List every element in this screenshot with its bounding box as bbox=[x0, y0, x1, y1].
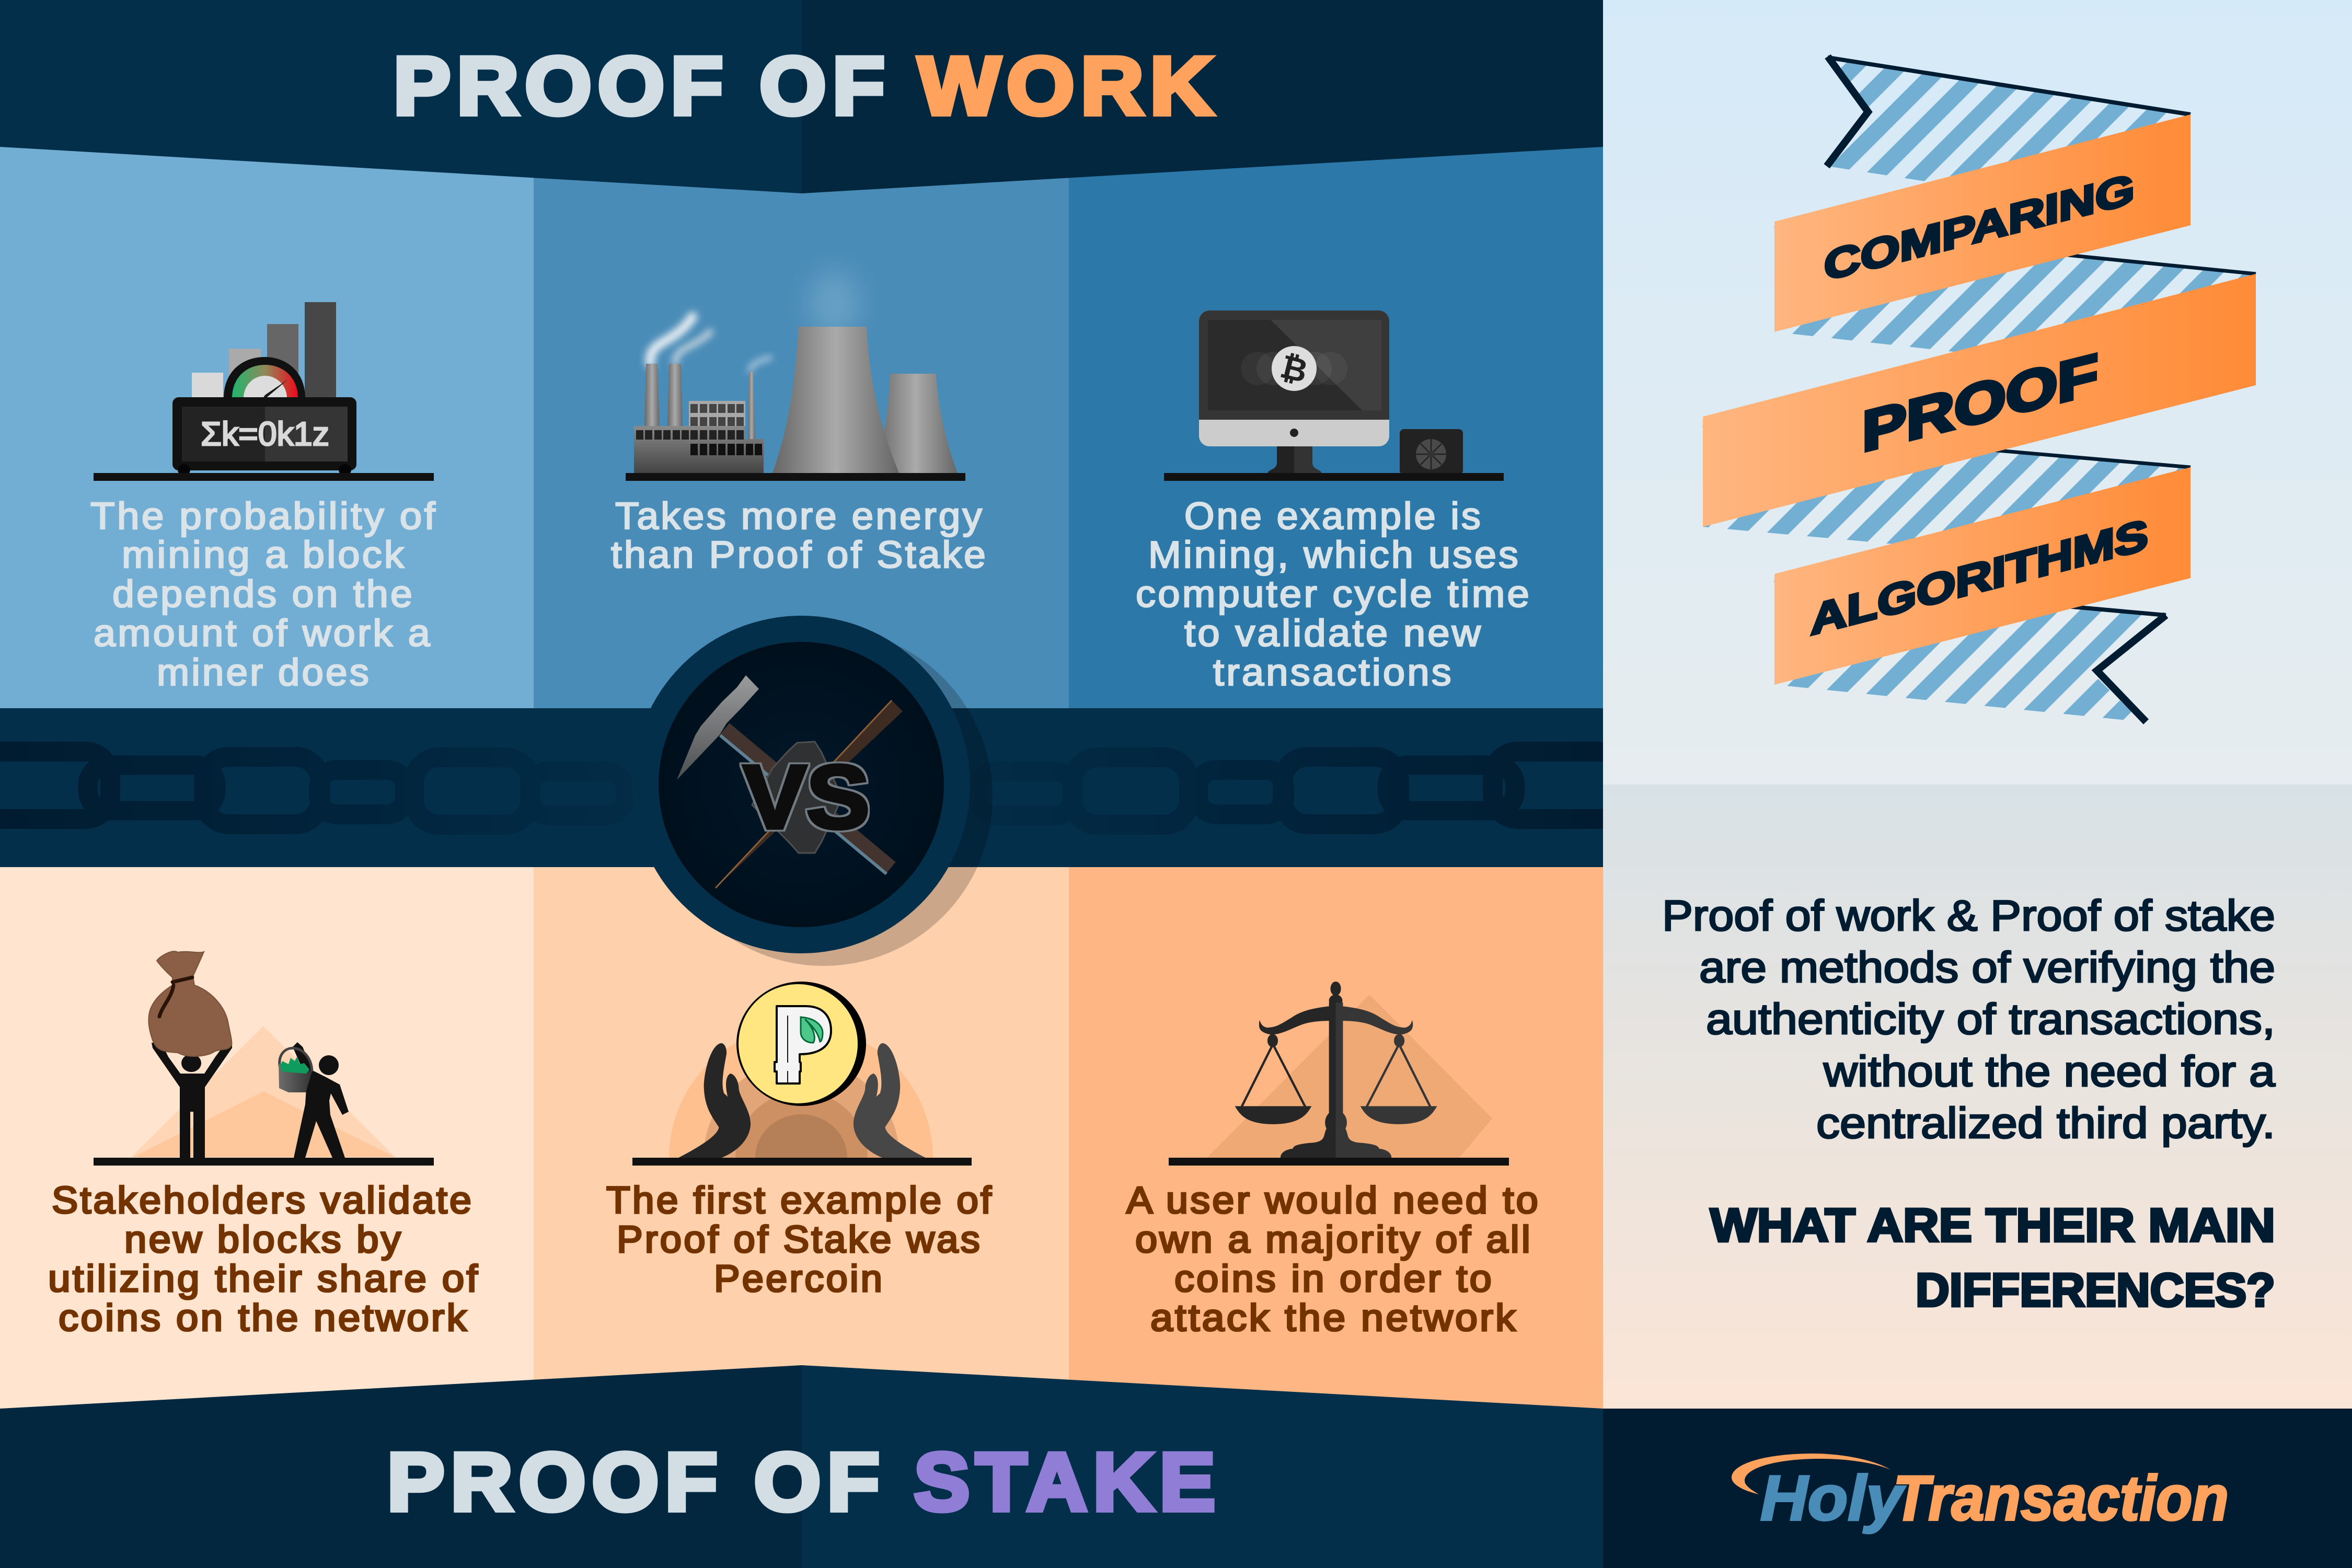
ribbon band: comparing bbox=[1774, 114, 2190, 332]
bitcoin symbol: ₿ bbox=[1277, 349, 1311, 390]
ribbon back stripes 4 bbox=[1774, 580, 2166, 722]
pick handle bbox=[720, 729, 891, 874]
vs text: VS bbox=[743, 747, 870, 847]
text: attack the network: own a majority of all bbox=[1135, 1219, 1532, 1261]
panel: proof of stake column 2 bbox=[534, 862, 1069, 1437]
header band bbox=[0, 0, 1603, 193]
footer band bbox=[0, 1365, 1603, 1568]
left hand bbox=[678, 1043, 751, 1158]
vs badge shadow bbox=[655, 628, 993, 966]
icon: computer with bitcoin and fan bbox=[1199, 310, 1463, 475]
shelf 6 bbox=[1169, 1158, 1509, 1166]
ribbon text: algorithms: ALGORITHMS bbox=[1811, 510, 2148, 644]
gauge readout: Σk=0k1z bbox=[201, 415, 329, 453]
title: proof of stake: PROOF OF bbox=[387, 1437, 886, 1528]
panel: proof of stake column 3 bbox=[1069, 862, 1603, 1437]
shelf 2 bbox=[626, 473, 965, 481]
text: mining example bbox=[1136, 495, 1531, 694]
chain band bbox=[0, 708, 1603, 867]
icon: peercoin held by hands bbox=[669, 982, 933, 1158]
ribbon band: algorithms bbox=[1774, 467, 2190, 685]
icon: balance scales bbox=[1207, 982, 1492, 1159]
logo: holytransaction: Transaction bbox=[1893, 1462, 2229, 1534]
panel: proof of work column 2 bbox=[534, 131, 1069, 716]
ribbon back stripes 2 bbox=[1774, 226, 2256, 385]
text: mining example: transactions bbox=[1213, 652, 1454, 694]
title: proof of work: WORK bbox=[918, 41, 1219, 132]
money bag bbox=[148, 951, 232, 1056]
panel: proof of work column 1 bbox=[0, 131, 534, 716]
panel: proof of work column 3 bbox=[1069, 131, 1603, 716]
chain: right bbox=[978, 752, 1624, 825]
title: proof of stake bbox=[387, 1437, 1221, 1528]
hammer spike bbox=[716, 700, 903, 888]
panel: proof of stake column 1 bbox=[0, 862, 534, 1437]
logo: holytransaction: Holy bbox=[1760, 1462, 1905, 1534]
text: question heading bbox=[1710, 1200, 2275, 1317]
text: intro paragraph: authenticity of transactions, bbox=[1706, 995, 2275, 1043]
panel: right upper background bbox=[1603, 0, 2352, 785]
text: probability of mining: mining a block bbox=[122, 534, 406, 576]
text: probability of mining: The probability of bbox=[90, 495, 437, 537]
text: mining example: One example is bbox=[1184, 495, 1483, 537]
text: mining example: Mining, which uses bbox=[1148, 534, 1520, 576]
text: question heading: DIFFERENCES? bbox=[1916, 1264, 2275, 1317]
title: proof of work bbox=[394, 41, 1219, 132]
ribbon back stripes 1 bbox=[1827, 56, 2190, 225]
text: energy: Takes more energy bbox=[615, 495, 984, 537]
text: peercoin bbox=[606, 1180, 994, 1300]
panel: logo footer bbox=[1603, 1409, 2352, 1568]
text: mining example: computer cycle time bbox=[1136, 573, 1531, 615]
text: energy bbox=[611, 495, 988, 576]
ribbon banner bbox=[1703, 56, 2256, 722]
text: probability of mining: amount of work a bbox=[94, 613, 432, 654]
logo: holytransaction bbox=[1732, 1454, 2229, 1534]
text: probability of mining: depends on the bbox=[112, 573, 414, 615]
shelf 4 bbox=[94, 1158, 434, 1166]
ribbon back stripes 3 bbox=[1703, 425, 2190, 571]
text: question heading: WHAT ARE THEIR MAIN bbox=[1710, 1200, 2275, 1252]
text: attack the network: A user would need to bbox=[1126, 1180, 1540, 1221]
text: probability of mining bbox=[90, 495, 437, 694]
text: intro paragraph: are methods of verifying the bbox=[1699, 943, 2275, 991]
shelf 3 bbox=[1164, 473, 1504, 481]
title: proof of work: PROOF OF bbox=[394, 41, 891, 132]
text: peercoin: The first example of bbox=[606, 1180, 994, 1221]
text: stakeholders: coins on the network bbox=[59, 1297, 469, 1339]
text: intro paragraph: Proof of work & Proof of stake bbox=[1662, 891, 2275, 940]
text: intro paragraph bbox=[1662, 891, 2276, 1147]
pick head bbox=[677, 675, 759, 780]
icon: difficulty gauge with bars bbox=[172, 302, 356, 476]
shield bbox=[752, 742, 842, 853]
text: mining example: to validate new bbox=[1184, 613, 1483, 654]
text: peercoin: Proof of Stake was bbox=[617, 1219, 982, 1261]
right hand bbox=[854, 1043, 926, 1158]
vs badge bbox=[632, 616, 970, 953]
text: attack the network bbox=[1126, 1180, 1540, 1339]
text: stakeholders: new blocks by bbox=[124, 1219, 403, 1261]
text: intro paragraph: centralized third party. bbox=[1816, 1099, 2275, 1147]
text: intro paragraph: without the need for a bbox=[1823, 1047, 2276, 1096]
shelf 1 bbox=[94, 473, 434, 481]
icon: stakeholders with money bag and bucket bbox=[131, 951, 395, 1158]
icon: factory and cooling towers bbox=[634, 271, 958, 473]
text: probability of mining: miner does bbox=[157, 652, 371, 694]
ribbon band: proof bbox=[1703, 274, 2256, 527]
title: proof of stake: STAKE bbox=[914, 1437, 1221, 1528]
text: attack the network: attack the network bbox=[1150, 1297, 1518, 1339]
text: stakeholders bbox=[48, 1180, 480, 1339]
text: stakeholders: Stakeholders validate bbox=[52, 1180, 474, 1221]
text: peercoin: Peercoin bbox=[714, 1258, 884, 1300]
text: stakeholders: utilizing their share of bbox=[48, 1258, 480, 1300]
text: energy: than Proof of Stake bbox=[611, 534, 988, 576]
panel: right lower background bbox=[1603, 785, 2352, 1409]
ribbon text: proof: PROOF bbox=[1862, 342, 2098, 464]
ribbon text: comparing: COMPARING bbox=[1824, 165, 2135, 290]
chain: left bbox=[0, 752, 625, 825]
text: attack the network: coins in order to bbox=[1174, 1258, 1494, 1300]
shelf 5 bbox=[632, 1158, 972, 1166]
